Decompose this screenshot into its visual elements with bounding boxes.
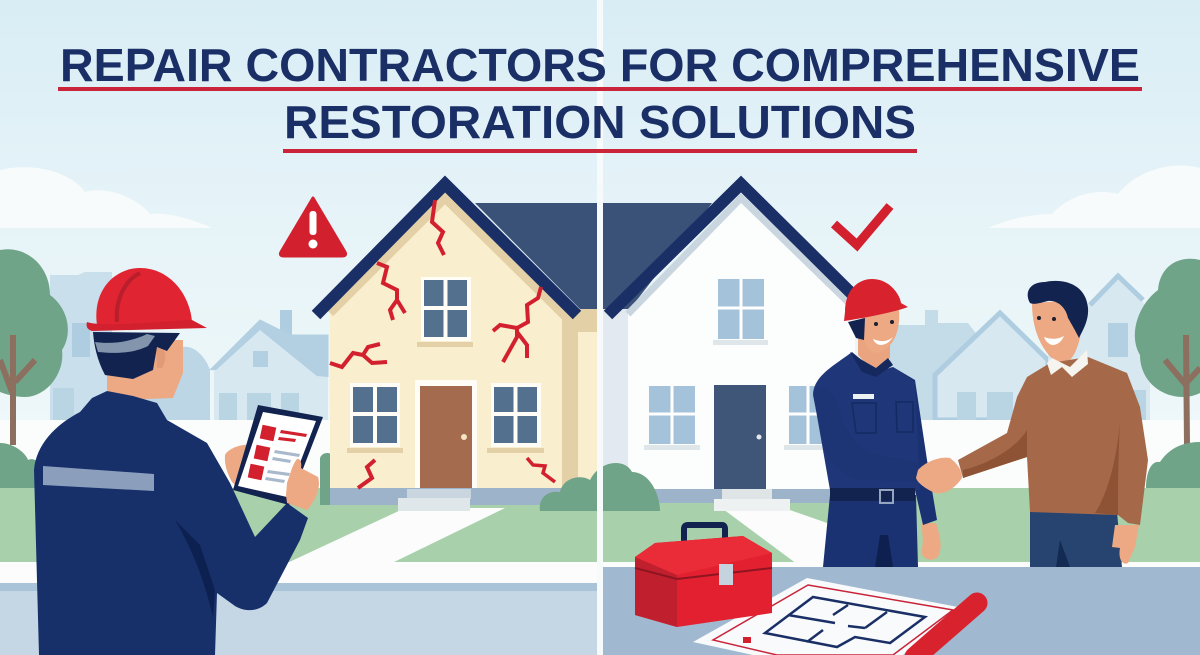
clouds bbox=[0, 166, 1200, 228]
neck bbox=[858, 335, 890, 375]
road right bbox=[600, 562, 1200, 655]
sweater shadow bbox=[1095, 420, 1120, 515]
bushes bbox=[0, 442, 1200, 505]
hair bbox=[1028, 281, 1088, 338]
background houses right bbox=[890, 276, 1150, 420]
restored house bbox=[600, 184, 855, 511]
reflective stripe bbox=[43, 466, 154, 491]
contractor in uniform bbox=[813, 279, 941, 567]
fence band and lawn bbox=[0, 420, 1200, 490]
roof trim bbox=[628, 198, 850, 314]
title: RESTORATION SOLUTIONS bbox=[284, 96, 916, 148]
walkways bbox=[285, 508, 830, 564]
door bbox=[415, 380, 477, 488]
face bbox=[862, 310, 899, 353]
smile bbox=[873, 337, 893, 345]
sweater bbox=[958, 357, 1148, 525]
handshake bbox=[916, 458, 962, 493]
upper window bbox=[417, 277, 473, 347]
hair bbox=[93, 332, 180, 379]
neck and head bbox=[107, 340, 183, 400]
shirt collar bbox=[1047, 350, 1088, 377]
eyes bbox=[1037, 316, 1056, 321]
tablet in hands bbox=[225, 405, 323, 510]
eyes bbox=[874, 320, 894, 326]
headband bbox=[95, 334, 155, 353]
title: REPAIR CONTRACTORS FOR COMPREHENSIVE bbox=[60, 39, 1140, 91]
title bbox=[58, 39, 1142, 153]
steps bbox=[398, 489, 471, 511]
red toolbox bbox=[635, 525, 772, 627]
upper window bbox=[713, 279, 768, 345]
neck and face bbox=[1032, 300, 1083, 365]
name badge bbox=[853, 394, 874, 399]
side roof bbox=[475, 203, 600, 309]
hand at side bbox=[921, 523, 941, 560]
open collar bbox=[850, 352, 893, 377]
damaged house bbox=[316, 184, 600, 511]
jacket bbox=[34, 391, 308, 655]
arm shadow bbox=[963, 430, 1027, 478]
jacket shadow bbox=[175, 520, 215, 618]
inspector with tablet bbox=[34, 268, 323, 655]
ear bbox=[156, 348, 165, 368]
divider bbox=[597, 0, 603, 655]
smile bbox=[1044, 336, 1064, 345]
front wall bbox=[330, 193, 562, 489]
hard hat bbox=[844, 279, 908, 321]
background houses left bbox=[50, 272, 328, 420]
door bbox=[714, 385, 766, 489]
check mark icon bbox=[834, 206, 890, 245]
gable roof bbox=[316, 184, 577, 315]
legs bbox=[823, 495, 918, 567]
hand bbox=[1112, 525, 1139, 564]
foundation bbox=[330, 488, 600, 505]
blueprint bbox=[693, 578, 977, 655]
left window bbox=[347, 383, 403, 453]
client in sweater bbox=[958, 281, 1148, 567]
near arm bbox=[813, 388, 918, 482]
belt bbox=[830, 488, 915, 503]
bush by divider bbox=[540, 463, 660, 511]
far arm bbox=[893, 367, 937, 525]
gable roof bbox=[608, 184, 852, 315]
pockets bbox=[852, 402, 913, 433]
side wall bbox=[600, 309, 630, 489]
foundation bbox=[600, 489, 830, 503]
tree right bbox=[1135, 259, 1200, 445]
left window bbox=[644, 386, 700, 450]
tree left bbox=[0, 249, 68, 445]
torso bbox=[813, 352, 920, 490]
warning icon bbox=[280, 198, 346, 256]
side hair bbox=[848, 318, 865, 340]
side wall bbox=[560, 309, 600, 489]
steps bbox=[714, 489, 790, 511]
hard hat bbox=[87, 268, 207, 331]
front wall bbox=[628, 193, 855, 489]
side roof bbox=[600, 203, 712, 309]
cracks bbox=[330, 200, 555, 488]
legs bbox=[1030, 512, 1122, 567]
right window bbox=[487, 383, 544, 453]
road left bbox=[0, 562, 600, 655]
roof trim bbox=[330, 198, 565, 316]
right window bbox=[784, 386, 830, 450]
